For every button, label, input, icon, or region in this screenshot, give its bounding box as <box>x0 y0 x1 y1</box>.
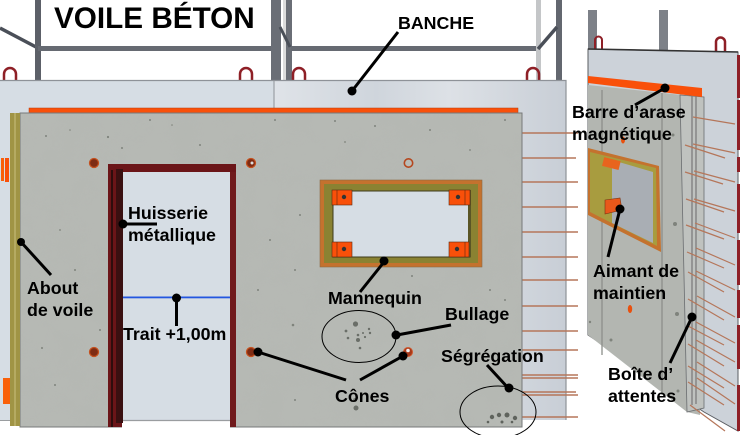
lifting hooks <box>4 68 539 81</box>
callout: aimant de maintien: Aimant de <box>593 261 679 281</box>
callout: banche: BANCHE <box>398 13 474 33</box>
side window <box>588 148 661 252</box>
side orange bar <box>588 76 702 97</box>
cones <box>90 158 413 356</box>
bullage zone <box>322 310 396 362</box>
metal door frame (huisserie) <box>108 164 236 429</box>
callout: aimant de maintien: maintien <box>593 283 666 303</box>
title: VOILE BÉTON <box>54 1 255 35</box>
red edge strips <box>737 55 740 431</box>
callout: trait +1,00m: Trait +1,00m <box>123 324 226 344</box>
callout: barre d'arase magnétique: magnétique <box>572 124 672 144</box>
side concrete face <box>588 85 700 415</box>
side formwork face <box>588 49 738 431</box>
callout: cônes: Cônes <box>335 386 389 406</box>
concrete wall <box>20 113 522 427</box>
callout: banche <box>348 13 474 96</box>
callout: bullage <box>392 304 509 340</box>
callout: barre d'arase magnétique: Barre d’arase <box>572 102 686 122</box>
side view of the wall <box>588 10 740 431</box>
callout: bullage: Bullage <box>445 304 509 324</box>
callout: ségrégation <box>441 346 544 392</box>
callout: boîte d'attentes <box>608 312 696 406</box>
segregation zone <box>354 386 536 435</box>
window magnets <box>332 190 470 257</box>
blue +1.00m line <box>123 296 230 298</box>
callout: trait +1,00m <box>123 294 226 344</box>
formwork stop end (about) <box>1 113 20 426</box>
callout: about de voile: de voile <box>27 300 93 320</box>
side magnets <box>605 198 622 214</box>
callout: barre d'arase magnétique <box>572 84 686 144</box>
callout: mannequin <box>328 256 422 308</box>
callout: mannequin: Mannequin <box>328 288 422 308</box>
side cones <box>628 305 632 313</box>
callout: boîte d'attentes: attentes <box>608 386 676 406</box>
callout: aimant de maintien <box>593 204 679 303</box>
scaffold frame <box>0 0 562 81</box>
callout: ségrégation: Ségrégation <box>441 346 544 366</box>
side return box <box>680 95 704 412</box>
callout: huisserie métallique: Huisserie <box>128 203 208 223</box>
formwork panel (banche) <box>0 80 566 420</box>
rebars <box>522 133 578 417</box>
callout: cônes <box>254 348 408 406</box>
callout: huisserie métallique <box>118 203 216 245</box>
side concrete specks <box>589 134 680 392</box>
callout: about de voile: About <box>27 278 78 298</box>
callout: huisserie métallique: métallique <box>128 225 216 245</box>
callout: boîte d'attentes: Boîte d’ <box>608 364 673 384</box>
window formwork (mannequin) <box>320 180 482 267</box>
side rebars <box>685 117 735 431</box>
callout: about de voile <box>17 238 93 320</box>
orange top bar <box>29 108 518 113</box>
